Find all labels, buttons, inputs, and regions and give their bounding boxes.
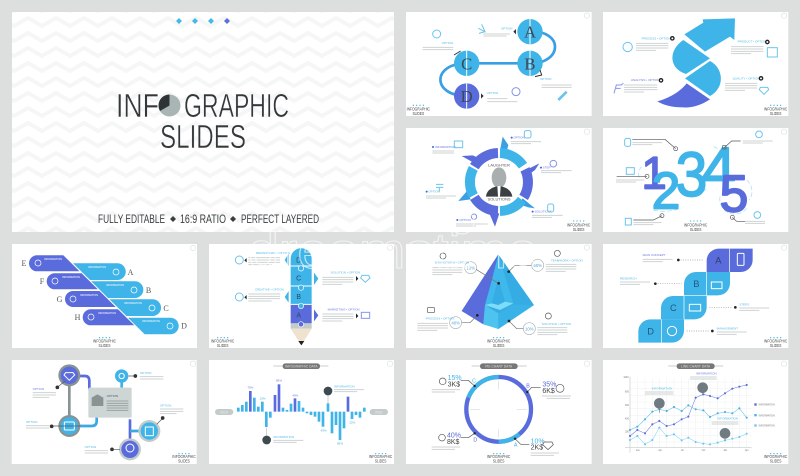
info card: OPTION xyxy=(107,394,118,398)
legend: INFORMATION xyxy=(759,404,775,407)
callouts: OPTION xyxy=(85,445,96,449)
label right xyxy=(540,160,572,173)
number 3: 3 xyxy=(676,140,707,210)
circle A: A xyxy=(524,23,536,42)
donut ring xyxy=(466,377,531,442)
pill letters: D xyxy=(181,322,187,330)
bar value labels: 85% xyxy=(276,379,282,383)
panel: pyramid xyxy=(406,244,592,349)
label B 35 percent xyxy=(526,382,571,398)
pill letters: E xyxy=(22,259,27,268)
label purple top left xyxy=(432,141,463,153)
label D xyxy=(235,251,290,265)
logo xyxy=(487,453,511,465)
node bulb xyxy=(119,438,141,460)
callout bottom right xyxy=(730,212,765,223)
markers xyxy=(654,382,730,441)
chart title pill xyxy=(273,363,328,369)
step D: D xyxy=(647,326,654,336)
axes: 800 xyxy=(625,392,630,394)
pill labels and icons: INFORMATION xyxy=(80,293,98,297)
axes: 400 xyxy=(625,418,630,420)
logo: SLIDES xyxy=(217,343,229,349)
title: SLIDES xyxy=(160,118,246,155)
label bottom left xyxy=(456,214,488,226)
logo: INFOGRAPHIC xyxy=(487,339,511,345)
marker notes: INFORMATION xyxy=(696,372,717,376)
callout 10 percent right xyxy=(508,313,571,335)
logo xyxy=(211,337,235,349)
logo: INFOGRAPHIC xyxy=(764,339,788,345)
pencil body xyxy=(291,248,312,345)
callout 50 percent top right xyxy=(507,250,583,273)
pill letters: F xyxy=(40,277,45,286)
label C xyxy=(322,270,370,284)
pills purple E F G H xyxy=(29,255,134,325)
subtitle: 16:9 RATIO xyxy=(180,214,226,226)
pill labels and icons: INFORMATION xyxy=(98,311,116,315)
node calendar xyxy=(138,420,160,442)
panel: line chart xyxy=(603,360,788,465)
panel: connected circle nodes xyxy=(12,360,197,465)
step A: A xyxy=(715,256,722,266)
label top right xyxy=(731,40,777,57)
grid xyxy=(630,378,752,448)
callout upper: INFORMATION xyxy=(334,384,355,388)
pill letters: A xyxy=(128,268,134,277)
callout top left xyxy=(625,138,678,151)
logo: INFOGRAPHIC xyxy=(172,454,196,460)
callout C xyxy=(709,303,769,310)
axes: 1000 xyxy=(623,377,629,379)
number 2: 2 xyxy=(652,161,680,219)
callouts: OPTION xyxy=(33,387,44,391)
bar value labels xyxy=(247,379,356,446)
connectors xyxy=(440,32,555,96)
number 5: 5 xyxy=(720,165,748,223)
pill letters: G xyxy=(57,295,63,304)
pill letters: C xyxy=(163,304,169,313)
label B 35 percent: B xyxy=(526,384,530,390)
callouts: OPTION xyxy=(140,371,151,375)
node mail xyxy=(58,415,80,437)
label B 35 percent: 6K$ xyxy=(542,388,555,395)
pill letters: B xyxy=(146,286,151,295)
chart title pill xyxy=(668,363,723,369)
logo: SLIDES xyxy=(178,459,190,465)
chart title pill: LINE CHART DATA xyxy=(681,364,711,368)
arrow segment four purple xyxy=(657,83,710,107)
bar value labels: 45% xyxy=(321,428,327,432)
logo: INFOGRAPHIC xyxy=(93,338,116,344)
panel: pie chart data xyxy=(406,360,592,465)
step C xyxy=(661,296,707,319)
decorative dashes xyxy=(639,147,752,214)
label A xyxy=(322,308,370,321)
logo xyxy=(407,105,430,117)
label purple top left: INFORMATION xyxy=(435,145,456,149)
panel: bar chart xyxy=(209,360,394,465)
subtitle xyxy=(98,214,319,226)
logo: INFOGRAPHIC xyxy=(407,106,430,112)
callout 50 percent top right: 50% xyxy=(533,263,542,268)
axes xyxy=(623,377,752,453)
logo: SLIDES xyxy=(573,227,585,233)
label D: BRAINSTORM • OPTION xyxy=(256,251,290,255)
callout left xyxy=(616,168,649,182)
axis pills: 2016 xyxy=(375,410,383,414)
axes: Oct xyxy=(702,449,706,452)
logo: INFOGRAPHIC xyxy=(487,454,511,460)
callout A: MAIN CONCEPT xyxy=(643,253,666,257)
label right: STEP xyxy=(543,166,550,170)
label top xyxy=(511,131,541,144)
label C 15 percent: 15% xyxy=(448,375,462,382)
callouts: OPTION xyxy=(160,403,171,407)
legend: INFORMATION xyxy=(759,425,775,428)
pyramid xyxy=(462,254,534,329)
axes: 200 xyxy=(625,432,630,434)
label C 15 percent xyxy=(432,375,476,392)
logo: INFOGRAPHIC xyxy=(567,223,591,229)
step B: B xyxy=(693,279,699,289)
label D: OPTION xyxy=(487,91,498,95)
label top left xyxy=(623,36,674,52)
label B xyxy=(535,70,572,100)
node share xyxy=(115,369,128,383)
label A 10 percent: A xyxy=(514,443,518,449)
panel: numbers 1 to 5 xyxy=(603,128,788,233)
chart title pill: INFOGRAPHIC DATA xyxy=(285,364,318,368)
bar value labels: 25% xyxy=(260,396,266,400)
circle D xyxy=(454,83,479,109)
callout 10 percent right: SOLUTION • OPTION xyxy=(542,322,571,326)
panel: stair steps xyxy=(603,244,788,349)
axis pills xyxy=(215,409,388,415)
logo xyxy=(172,453,196,465)
number 1: 1 xyxy=(642,147,667,198)
callout A xyxy=(643,253,704,262)
ring segments xyxy=(470,153,528,211)
logo: SLIDES xyxy=(98,343,110,348)
label D 40 percent xyxy=(432,432,477,449)
chart title pill: PIE CHART DATA xyxy=(485,364,513,368)
label bottom left xyxy=(614,78,663,93)
label top left: PROCESS • OPTION xyxy=(642,36,670,40)
legend: INFORMATION xyxy=(759,414,775,417)
callout B xyxy=(620,276,682,285)
callout 10 percent top left: 10% xyxy=(466,265,475,270)
axes: Apr xyxy=(658,449,662,452)
circle D: D xyxy=(461,87,473,106)
title: GRAPHIC xyxy=(184,87,289,124)
pill labels and icons xyxy=(35,257,173,329)
label C xyxy=(423,30,461,55)
logo xyxy=(764,105,788,117)
label bottom right: SOLUTIONS xyxy=(535,210,552,214)
logo xyxy=(764,453,788,465)
label D xyxy=(481,88,520,102)
node diamond xyxy=(58,364,80,386)
step C: C xyxy=(670,303,677,313)
axis pills: 2015 xyxy=(220,410,228,414)
logo: SLIDES xyxy=(375,459,387,465)
label top right: PRODUCT • OPTION xyxy=(738,40,767,44)
businessman: LAUGHTER xyxy=(488,162,510,167)
title: INF xyxy=(116,87,159,124)
pill labels and icons: INFORMATION xyxy=(88,265,106,269)
label A 10 percent xyxy=(514,437,559,455)
bar value labels: 75% xyxy=(247,385,254,389)
callout lower: INFORMATION xyxy=(273,435,294,439)
marker notes: INFORMATION xyxy=(717,417,738,421)
arrow segment three xyxy=(685,61,721,96)
panel: S arrow xyxy=(603,12,788,117)
label B 35 percent: 35% xyxy=(542,382,556,389)
pill letters: H xyxy=(75,313,81,322)
label B: CREATIVE • OPTION xyxy=(255,288,284,292)
pencil body: D xyxy=(296,257,301,264)
label A: MARKETING • OPTION xyxy=(328,308,360,312)
label A xyxy=(478,24,516,36)
chart title pill xyxy=(472,363,527,369)
callout 10 percent top left xyxy=(432,253,500,285)
logo: INFOGRAPHIC xyxy=(369,454,393,460)
callout top right xyxy=(723,131,773,149)
circle A xyxy=(517,19,543,44)
pencil tabs xyxy=(285,254,318,321)
callout C: STEPS xyxy=(739,303,749,307)
series light xyxy=(630,428,747,444)
panel: pencil xyxy=(209,244,394,349)
bar value labels: 22% xyxy=(349,420,356,424)
step B xyxy=(684,272,730,295)
pills blue A B C D xyxy=(73,263,179,334)
logo: SLIDES xyxy=(690,227,702,233)
callout D xyxy=(687,327,747,334)
businessman xyxy=(486,162,512,202)
logo xyxy=(684,220,708,233)
label A 10 percent: 2K$ xyxy=(531,444,543,451)
callout D: MANAGEMENT xyxy=(717,327,738,331)
logo xyxy=(567,220,591,233)
bar value labels: 85% xyxy=(337,442,343,446)
logo: SLIDES xyxy=(770,459,782,465)
callout 40 percent left xyxy=(417,308,479,330)
marker notes: INFORMATION xyxy=(652,386,672,390)
label bottom left: ANALYSIS • OPTION xyxy=(631,78,660,82)
label left: OPTION xyxy=(428,190,440,194)
callout 40 percent left: PROCESS • OPTION xyxy=(426,316,454,320)
logo: INFOGRAPHIC xyxy=(764,454,788,460)
businessman: SOLUTIONS xyxy=(487,197,511,202)
marker notes xyxy=(645,372,738,424)
logo xyxy=(764,337,788,349)
bar value labels: 40% xyxy=(292,394,299,398)
label bottom right: QUALITY • OPTION xyxy=(733,76,760,80)
series blue xyxy=(630,405,747,430)
label C: SOLUTION • OPTION xyxy=(331,270,360,274)
logo: INFOGRAPHIC xyxy=(211,339,235,345)
pill labels and icons: INFORMATION xyxy=(124,301,142,305)
series purple xyxy=(630,385,747,436)
logo: INFOGRAPHIC xyxy=(684,223,708,229)
circle B: B xyxy=(524,54,536,73)
connectors xyxy=(69,376,149,449)
label A 10 percent: 10% xyxy=(531,438,545,445)
logo: SLIDES xyxy=(493,343,505,349)
callout lower xyxy=(262,428,303,444)
logo: SLIDES xyxy=(412,111,425,117)
pencil body: B xyxy=(296,294,301,301)
pill letters xyxy=(22,259,187,330)
callouts xyxy=(26,371,183,453)
pill labels and icons: INFORMATION xyxy=(142,319,160,323)
info card xyxy=(88,388,132,418)
logo xyxy=(369,453,393,465)
label B: OPTION xyxy=(540,77,551,81)
callout 10 percent top left: BRAINSTORM • OPTION xyxy=(435,260,469,264)
callout upper xyxy=(324,384,364,403)
label bottom right xyxy=(532,204,563,217)
pencil body: A xyxy=(296,313,301,320)
bars xyxy=(237,384,366,440)
number 4: 4 xyxy=(702,135,736,203)
callouts: OPTION xyxy=(26,420,37,424)
axes: 600 xyxy=(625,405,630,407)
axes: Jul xyxy=(681,450,684,452)
axes: Jan xyxy=(723,450,728,452)
label bottom left: OPTION xyxy=(459,218,471,222)
title xyxy=(116,87,289,155)
label A: OPTION xyxy=(501,26,512,30)
logo: SLIDES xyxy=(770,343,782,349)
callout B: RESEARCH xyxy=(620,276,637,280)
step D xyxy=(638,319,684,343)
circle C xyxy=(454,51,479,76)
logo: SLIDES xyxy=(770,111,782,117)
step A xyxy=(707,249,753,272)
label left xyxy=(426,184,456,198)
callout 40 percent left: 40% xyxy=(451,320,460,325)
panel: circular arrows with businessman xyxy=(406,128,592,233)
logo xyxy=(487,337,511,349)
label C: OPTION xyxy=(442,41,453,45)
panel: diagonal pills xyxy=(12,244,197,348)
icon: four decorative diamonds xyxy=(176,18,230,24)
subtitle: PERFECT LAYERED xyxy=(241,214,319,226)
arrow segment top xyxy=(684,18,735,52)
pencil body: C xyxy=(296,276,301,283)
subtitle: FULLY EDITABLE xyxy=(98,214,165,226)
legend xyxy=(754,403,775,428)
pill labels and icons: INFORMATION xyxy=(62,275,80,279)
circle B xyxy=(517,51,543,76)
callout 50 percent top right: TEAMWORK • OPTION xyxy=(551,259,583,263)
callout bottom left xyxy=(625,214,664,225)
label bottom right xyxy=(725,76,769,94)
label D 40 percent: 40% xyxy=(447,433,461,440)
callout 10 percent right: 10% xyxy=(525,326,534,331)
label B xyxy=(235,288,284,301)
logo: INFOGRAPHIC xyxy=(764,106,788,112)
label D 40 percent: 8K$ xyxy=(447,439,460,446)
arrow segment two xyxy=(672,40,710,74)
logo xyxy=(93,337,116,348)
logo: SLIDES xyxy=(493,459,505,465)
label top: OPTION xyxy=(513,136,525,140)
ring tails xyxy=(458,137,539,227)
axes: Jan xyxy=(636,450,640,452)
watermark: dreamstime xyxy=(248,223,538,279)
label C 15 percent: C xyxy=(472,379,476,385)
pill labels and icons: INFORMATION xyxy=(106,283,124,287)
circle C: C xyxy=(461,54,472,73)
label D 40 percent: D xyxy=(473,438,477,444)
label C 15 percent: 3K$ xyxy=(448,382,460,389)
axes: Apr xyxy=(745,449,749,452)
pill labels and icons: INFORMATION xyxy=(44,257,62,261)
panel: ABCD circles process xyxy=(406,12,592,117)
panel: cover slide xyxy=(12,12,394,232)
